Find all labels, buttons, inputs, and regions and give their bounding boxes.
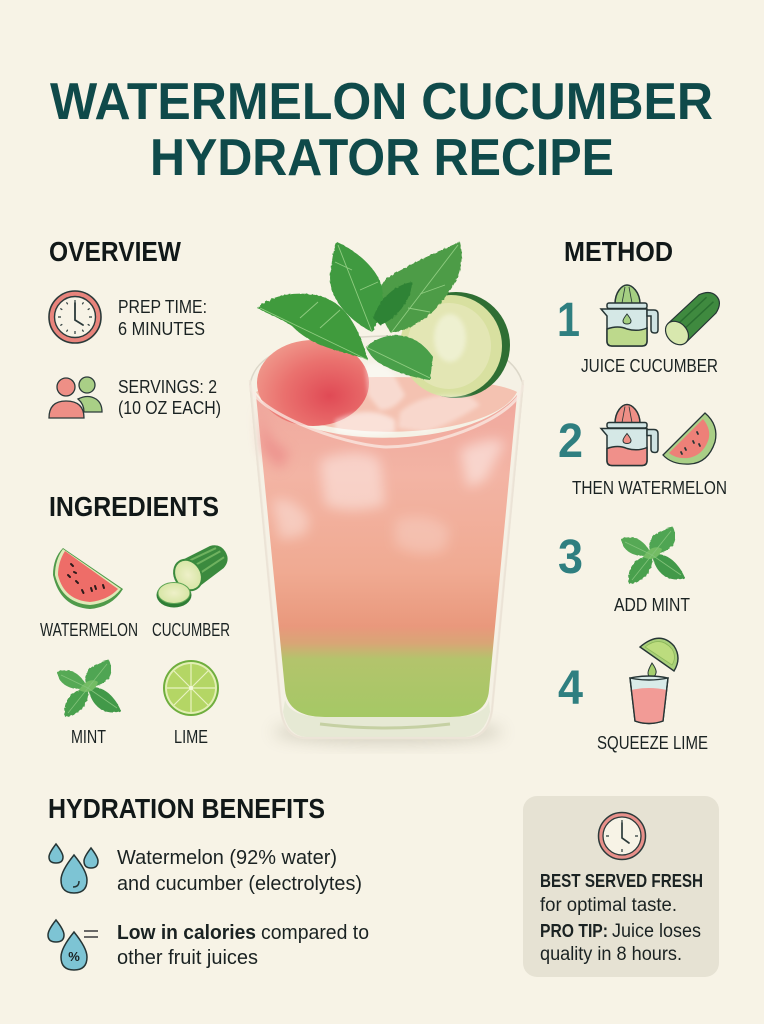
liquid: [256, 395, 517, 717]
icon: lime over glass: [630, 638, 678, 724]
text: pro tip: [540, 921, 701, 965]
text: low in calories: [117, 922, 369, 969]
drink photo: glass with garnish: [250, 242, 523, 744]
ice cubes: [272, 363, 505, 554]
title: [50, 73, 713, 187]
label: squeeze lime: SQUEEZE LIME: [597, 732, 708, 753]
text: low in calories: Low in calories: [117, 922, 256, 944]
text: best served fresh: for optimal taste.: [540, 895, 677, 916]
icon: percent drop: [48, 920, 98, 970]
step 1 number: 1: [557, 294, 580, 347]
text: pro tip: Juice loses: [612, 921, 701, 942]
text: prep time: PREP TIME:: [118, 296, 207, 317]
label: mint: MINT: [71, 726, 106, 747]
icon: cucumber: [156, 538, 234, 608]
shadow: [273, 720, 503, 744]
text: servings: (10 OZ EACH): [118, 397, 221, 418]
step 3 number: 3: [558, 531, 583, 584]
icon: cucumber: [661, 287, 725, 349]
text: prep time: [118, 296, 207, 339]
text: watermelon and cucumber: [117, 847, 362, 895]
text: best served fresh: [540, 871, 703, 916]
label: lime: LIME: [174, 726, 208, 747]
text: servings: SERVINGS: 2: [118, 376, 217, 397]
text: best served fresh: BEST SERVED FRESH: [540, 871, 703, 891]
icon: lime: [163, 660, 219, 716]
icon: clock: [598, 812, 646, 860]
icon: watermelon slice: [53, 548, 123, 609]
icon: juicer watermelon: [601, 404, 658, 466]
icon: clock: [49, 291, 101, 343]
heading: ingredients: INGREDIENTS: [49, 491, 219, 522]
text: pro tip: PRO TIP:: [540, 921, 608, 941]
icon: percent drop: %: [68, 949, 80, 964]
watermelon ball: [257, 340, 369, 426]
icon: water drops: [49, 844, 98, 893]
icon: mint: [621, 527, 685, 584]
heading: hydration benefits: HYDRATION BENEFITS: [48, 793, 325, 824]
step 2 number: 2: [558, 415, 583, 468]
red tint: [258, 400, 290, 470]
glass back: [250, 336, 523, 738]
icon: people: [49, 377, 102, 418]
text: watermelon and cucumber: and cucumber (electrolytes): [117, 873, 362, 895]
label: then watermelon: THEN WATERMELON: [572, 477, 727, 498]
glass base: [283, 700, 490, 737]
heading: overview: OVERVIEW: [49, 236, 182, 267]
label: cucumber: CUCUMBER: [152, 619, 230, 640]
label: juice cucumber: JUICE CUCUMBER: [581, 355, 718, 376]
panel: overview: [49, 236, 221, 418]
text: pro tip: quality in 8 hours.: [540, 944, 682, 965]
title: HYDRATOR RECIPE: [150, 129, 614, 187]
mint veins: [260, 245, 458, 378]
title: WATERMELON CUCUMBER: [50, 73, 713, 131]
text: watermelon and cucumber: Watermelon (92% water): [117, 847, 337, 869]
icon: juicer cucumber: [601, 285, 658, 346]
text: low in calories: other fruit juices: [117, 947, 258, 969]
panel: hydration benefits: [48, 793, 369, 970]
icon: watermelon wedge: [663, 413, 716, 464]
label: watermelon: WATERMELON: [40, 619, 138, 640]
glass rim: [250, 385, 523, 447]
text: prep time: 6 MINUTES: [118, 318, 205, 339]
mint sprig: [257, 242, 462, 380]
icon: mint: [57, 660, 121, 717]
label: add mint: ADD MINT: [614, 594, 690, 615]
step 4 number: 4: [558, 662, 583, 715]
panel: method: [557, 236, 727, 753]
liquid surface: [256, 377, 517, 432]
panel: ingredients: [40, 491, 234, 747]
heading: method: METHOD: [564, 236, 673, 267]
text: servings: [118, 376, 221, 418]
cucumber slice: [400, 292, 510, 398]
panel: pro tip: [523, 796, 719, 977]
text: low in calories: compared to: [261, 922, 369, 944]
